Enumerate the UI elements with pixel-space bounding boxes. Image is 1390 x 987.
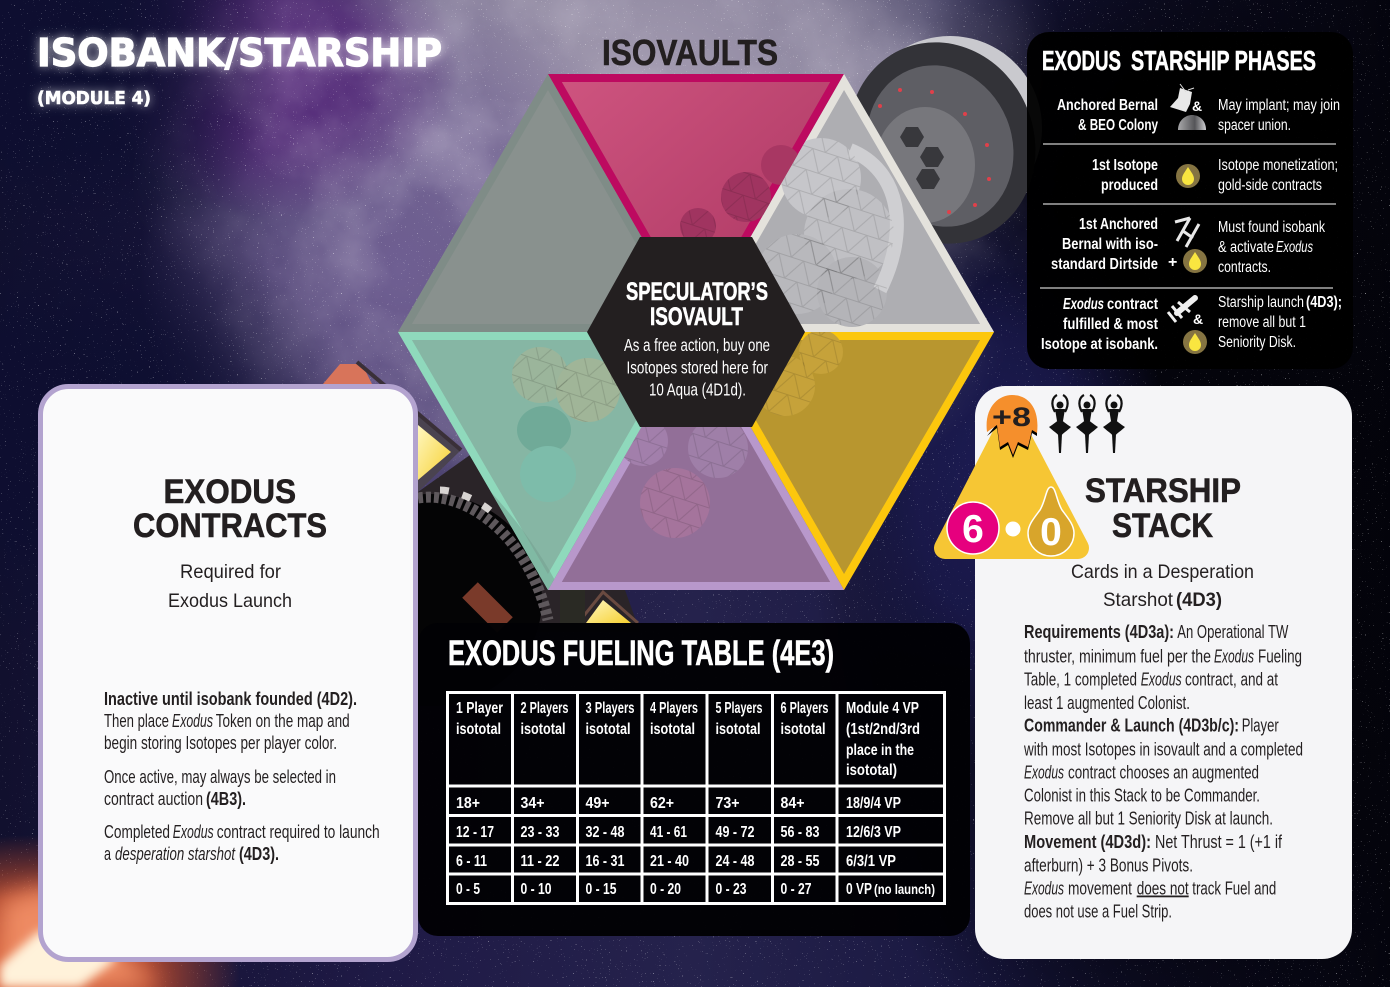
center panel: speculator's isovault: [587, 237, 805, 427]
table header row: 4 Players: [650, 700, 698, 717]
contract rules text: (4D3).: [239, 843, 279, 864]
stack rules text: contract chooses an augmented: [1068, 762, 1259, 782]
phase 3 requirement: [1051, 216, 1158, 273]
table header row: (1st/2nd/3rd: [846, 721, 920, 738]
stack rules text: movement: [1068, 878, 1132, 898]
center panel: speculator's isovault: Isotopes stored here for: [626, 358, 768, 378]
table row 1: 34+: [520, 795, 544, 812]
contract rules text: Then place: [104, 710, 169, 731]
contract rules text: Inactive until isobank founded (4D2).: [104, 688, 357, 709]
subheading: (4D3): [1176, 589, 1222, 611]
phase 4 effect: [1218, 294, 1342, 351]
table header row: isototal: [716, 721, 760, 738]
contract rules text: a: [104, 843, 111, 864]
stack rules text: Exodus: [1024, 762, 1064, 782]
phase 3 effect: [1218, 219, 1325, 276]
vault: grey: [398, 74, 642, 332]
center panel: speculator's isovault: As a free action, buy one: [624, 335, 770, 355]
phase 1 effect: May implant; may join: [1218, 97, 1340, 114]
phase 4 effect: Seniority Disk.: [1218, 334, 1296, 351]
stack rules text: Player: [1242, 716, 1279, 736]
station disk illustration: [818, 6, 1072, 272]
subheading: [168, 561, 292, 612]
heading: starship stack: STARSHIP: [1085, 472, 1241, 510]
table row 1: [456, 795, 901, 812]
table row 1: 18/9/4 VP: [846, 795, 901, 812]
phase 4 effect: (4D3);: [1306, 294, 1342, 311]
panel: exodus contracts: [40, 386, 416, 960]
heading: title: (MODULE 4): [37, 88, 151, 109]
phase 3 effect: contracts.: [1218, 259, 1271, 276]
phase 4 requirement: [1041, 296, 1158, 353]
contract rules text: contract auction: [104, 788, 203, 809]
table row 4: [456, 881, 935, 898]
phase 1 effect: [1218, 97, 1340, 134]
stack rules text: An Operational TW: [1177, 622, 1288, 642]
table header row: isototal: [456, 721, 501, 738]
heading: title: ISOBANK/STARSHIP: [37, 31, 442, 75]
heading: title: [37, 31, 442, 109]
icon: bernal and dome: &: [1192, 98, 1202, 114]
table row 1: 18+: [456, 795, 480, 812]
stack rules text: track Fuel and: [1192, 878, 1276, 898]
stack rules text: thruster, minimum fuel per the: [1024, 646, 1211, 666]
contract rules text: [104, 688, 380, 864]
stack rules text: contract, and at: [1185, 670, 1278, 690]
phase 1 requirement: & BEO Colony: [1078, 117, 1158, 134]
table row 2: 12 - 17: [456, 824, 494, 841]
stack rules text: [1023, 622, 1303, 922]
table header row: Module 4 VP: [846, 700, 919, 717]
contract rules text: Token on the map and: [216, 710, 350, 731]
phase 1 requirement: [1057, 97, 1158, 134]
table row 2: [456, 824, 901, 841]
table row 4: 0 - 23: [716, 881, 747, 898]
table row 3: [456, 853, 896, 870]
phase 2 requirement: produced: [1101, 177, 1158, 194]
stack rules text: Remove all but 1 Seniority Disk at launch.: [1024, 808, 1273, 828]
vault: crimson: [548, 74, 844, 237]
phase 4 effect: Starship launch: [1218, 294, 1304, 311]
phase 3 effect: Must found isobank: [1218, 219, 1325, 236]
table header row: 6 Players: [780, 700, 828, 717]
stack rules text: Exodus: [1141, 670, 1182, 690]
phase 4 requirement: Exodus: [1063, 296, 1104, 313]
stack rules text: afterburn) + 3 Bonus Pivots.: [1024, 856, 1193, 876]
vault: aqua: [398, 332, 642, 590]
contract rules text: desperation starshot: [115, 843, 236, 864]
vault: yellow: [750, 332, 994, 590]
table row 3: 6/3/1 VP: [846, 853, 896, 870]
stack rules text: Exodus: [1214, 646, 1254, 666]
table row 3: 6 - 11: [456, 853, 487, 870]
phase 4 requirement: fulfilled & most: [1063, 316, 1158, 333]
contract rules text: Once active, may always be selected in: [104, 766, 336, 787]
subheading: [1071, 561, 1254, 611]
phase 2 requirement: [1092, 157, 1158, 194]
stack rules text: least 1 augmented Colonist.: [1024, 693, 1190, 713]
stack rules text: with most Isotopes in isovault and a completed: [1023, 740, 1303, 760]
contract rules text: contract required to launch: [217, 821, 380, 842]
table row 3: 28 - 55: [780, 853, 820, 870]
table row 1: 84+: [780, 795, 804, 812]
icon: colonist card badge: [945, 395, 1078, 556]
icon: starship and isotope: [1168, 298, 1207, 354]
engine flare: [0, 780, 300, 987]
isovault hexagon: [398, 74, 994, 590]
phase 2 effect: gold-side contracts: [1218, 177, 1322, 194]
panel: exodus fueling table: EXODUS FUELING TABLE (4E3): [448, 634, 834, 673]
table header row: isototal: [520, 721, 566, 738]
table row 4: 0 - 5: [456, 881, 480, 898]
subheading: Exodus Launch: [168, 590, 292, 612]
table header row: isototal: [586, 721, 630, 738]
heading: starship stack: [1085, 472, 1241, 545]
table header row: 5 Players: [716, 700, 762, 717]
heading: exodus starship phases: EXODUS: [1042, 45, 1121, 76]
stack rules text: Net Thrust = 1 (+1 if: [1155, 832, 1283, 852]
table row 3: 24 - 48: [716, 853, 755, 870]
phase 2 effect: [1218, 157, 1338, 194]
phase 2 effect: Isotope monetization;: [1218, 157, 1338, 174]
fueling table grid: [447, 692, 945, 904]
table row 2: 32 - 48: [586, 824, 625, 841]
phase 3 effect: & activate: [1218, 239, 1274, 256]
table row 3: 16 - 31: [586, 853, 625, 870]
icon: isotope: [1176, 164, 1200, 188]
icon: colonist card badge: 6: [962, 508, 984, 551]
phase 3 effect: Exodus: [1276, 239, 1313, 256]
heading: isovaults: ISOVAULTS: [602, 32, 778, 73]
table row 3: 21 - 40: [650, 853, 689, 870]
table row 4: 0 - 15: [586, 881, 617, 898]
panel: starship stack: [945, 386, 1352, 959]
heading: starship stack: STACK: [1112, 507, 1213, 545]
table row 4: (no launch): [874, 882, 935, 897]
table header row: isototal: [780, 721, 826, 738]
panel: exodus starship phases: [1027, 32, 1353, 369]
icon: colonist card badge: 0: [1040, 511, 1062, 554]
stack rules text: does not: [1137, 878, 1189, 898]
table header row: isototal): [846, 762, 897, 779]
stack rules text: Exodus: [1024, 878, 1064, 898]
vault: purple: [548, 427, 844, 590]
icon: dirtside and isotope: +: [1168, 254, 1177, 271]
heading: exodus contracts: EXODUS: [164, 473, 296, 511]
stack rules text: Requirements (4D3a):: [1024, 622, 1174, 642]
heading: exodus starship phases: [1042, 45, 1316, 76]
contract rules text: (4B3).: [206, 788, 246, 809]
subheading: Required for: [180, 561, 281, 583]
table row 2: 12/6/3 VP: [846, 824, 901, 841]
subheading: Cards in a Desperation: [1071, 561, 1254, 583]
contract rules text: Completed: [104, 821, 170, 842]
icon: three ballerinas: [1049, 395, 1125, 453]
stack rules text: Commander & Launch (4D3b/c):: [1024, 716, 1239, 736]
icon: colonist card badge: +8: [992, 402, 1031, 432]
icon: dirtside and isotope: [1168, 218, 1207, 273]
phase 4 requirement: Isotope at isobank.: [1041, 336, 1158, 353]
table row 1: 73+: [716, 795, 740, 812]
panel: exodus fueling table: [418, 623, 970, 936]
center panel: speculator's isovault: SPECULATOR’S: [626, 278, 768, 306]
table row 4: 0 - 10: [520, 881, 552, 898]
ship machinery illustration: [318, 362, 640, 706]
icon: bernal and dome: [1170, 84, 1206, 130]
stack rules text: Movement (4D3d):: [1024, 832, 1151, 852]
table row 3: 11 - 22: [520, 853, 560, 870]
table header row: isototal: [650, 721, 695, 738]
phase 4 requirement: contract: [1107, 296, 1158, 313]
table row 1: 49+: [586, 795, 610, 812]
phase 1 effect: spacer union.: [1218, 117, 1291, 134]
stack rules text: Colonist in this Stack to be Commander.: [1024, 786, 1260, 806]
table row 2: 41 - 61: [650, 824, 687, 841]
phase 3 requirement: Bernal with iso-: [1062, 236, 1158, 253]
table row 4: 0 - 27: [780, 881, 812, 898]
subheading: Starshot: [1103, 589, 1174, 611]
table header row: 2 Players: [520, 700, 568, 717]
stack rules text: does not use a Fuel Strip.: [1024, 902, 1172, 922]
center panel: speculator's isovault: 10 Aqua (4D1d).: [649, 380, 746, 400]
contract rules text: Exodus: [173, 821, 214, 842]
phase 4 effect: remove all but 1: [1218, 314, 1306, 331]
table row 2: 23 - 33: [520, 824, 560, 841]
colony domes overlay: [470, 138, 897, 590]
table header row: 1 Player: [456, 700, 503, 717]
table header row: place in the: [846, 742, 914, 759]
stack rules text: Fueling: [1258, 646, 1302, 666]
table header row: [456, 700, 920, 779]
phase 2 requirement: 1st Isotope: [1092, 157, 1158, 174]
table row 1: 62+: [650, 795, 674, 812]
stack rules text: Table, 1 completed: [1024, 670, 1137, 690]
heading: exodus contracts: CONTRACTS: [133, 507, 327, 545]
vault: white: [750, 74, 994, 332]
phase 3 requirement: standard Dirtside: [1051, 256, 1158, 273]
center panel: speculator's isovault: ISOVAULT: [650, 303, 743, 331]
contract rules text: Exodus: [172, 710, 213, 731]
phase 1 requirement: Anchored Bernal: [1057, 97, 1158, 114]
table row 4: 0 - 20: [650, 881, 681, 898]
heading: exodus contracts: [133, 473, 327, 545]
icon: starship and isotope: &: [1193, 311, 1203, 327]
contract rules text: begin storing Isotopes per player color.: [104, 732, 337, 753]
table header row: 3 Players: [586, 700, 634, 717]
phase 3 requirement: 1st Anchored: [1079, 216, 1158, 233]
table row 4: 0 VP: [846, 881, 872, 898]
heading: exodus starship phases: STARSHIP PHASES: [1131, 45, 1316, 76]
table row 2: 56 - 83: [780, 824, 820, 841]
table row 2: 49 - 72: [716, 824, 754, 841]
